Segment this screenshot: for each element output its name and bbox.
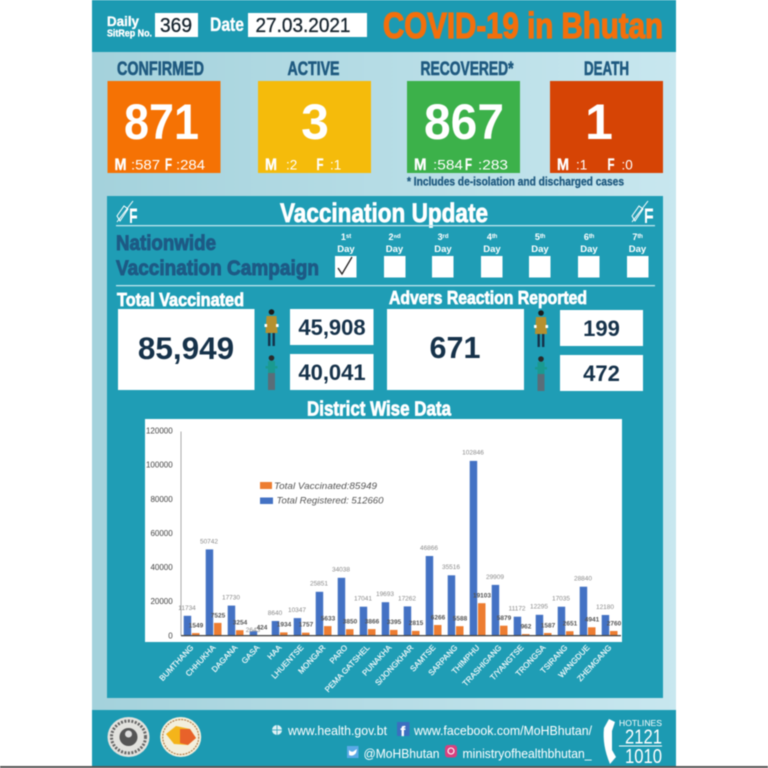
vaccinated values: 5588	[453, 616, 468, 622]
campaign heading: Vaccination Campaign	[116, 257, 319, 280]
day tracker: Day	[629, 244, 647, 255]
district labels	[158, 643, 613, 694]
registered values: 11734	[178, 605, 196, 612]
registered values: 12180	[596, 604, 614, 611]
male reactions	[560, 310, 643, 346]
female vaccinated	[290, 354, 374, 390]
panel: confirmed: F	[165, 155, 172, 174]
district labels: WANGDUE	[557, 643, 591, 680]
registered values: 12295	[530, 604, 548, 610]
icon: man	[264, 309, 279, 346]
registered values: 19693	[376, 591, 394, 598]
day tracker	[335, 232, 648, 278]
district labels: TSIRANG	[539, 643, 569, 675]
total vaccinated value	[118, 309, 254, 390]
district heading: District Wise Data	[307, 398, 452, 420]
registered values: 28840	[574, 576, 592, 582]
panel: active: :1	[330, 158, 341, 172]
day tracker: 4ᵗʰ	[487, 232, 498, 242]
website: www.health.gov.bt	[287, 723, 387, 738]
date label: Date	[210, 15, 244, 36]
district labels: DAGANA	[210, 643, 240, 674]
panel: recovered: 867	[424, 94, 504, 150]
vaccinated values: 1587	[541, 622, 556, 630]
vaccinated values: 962	[521, 624, 532, 630]
y axis: 80000	[150, 495, 173, 504]
panel: recovered	[407, 59, 520, 174]
panel: death	[550, 59, 663, 174]
registered values: 17041	[354, 596, 372, 602]
adverse reaction value: 671	[430, 331, 480, 365]
registered values	[178, 450, 614, 634]
y axis: 120000	[146, 426, 173, 436]
vaccinated values: 424	[257, 624, 268, 632]
panel: confirmed: :587	[131, 158, 160, 172]
panel: death: :0	[622, 158, 633, 172]
district labels: HAA	[266, 643, 284, 661]
y axis: 20000	[150, 597, 173, 606]
registered values: 50742	[200, 538, 218, 546]
district labels: S/JONGKHAR	[373, 643, 416, 687]
registered values: 102846	[462, 450, 484, 456]
hotlines	[619, 718, 662, 768]
total vaccinated value: 85,949	[138, 330, 234, 366]
panel: recovered: RECOVERED*	[420, 59, 514, 80]
logo: ministry emblem	[108, 717, 150, 757]
day tracker: 2ⁿᵈ	[388, 232, 401, 242]
registered values: 10347	[288, 607, 306, 614]
panel: recovered: :283	[478, 158, 508, 172]
registered values: 17035	[552, 596, 570, 602]
legend: Total Vaccinated:85949	[274, 481, 377, 491]
vaccinated values: 5879	[497, 615, 512, 622]
hotlines: 1010	[625, 746, 662, 768]
panel: death: M	[557, 155, 569, 174]
title: COVID-19 in Bhutan	[383, 5, 663, 46]
day tracker: 6ᵗʰ	[584, 232, 595, 242]
district labels: PEMA GATSHEL	[323, 643, 372, 694]
day tracker: Day	[483, 244, 501, 255]
campaign heading	[116, 232, 319, 280]
panel: confirmed: M	[114, 155, 126, 174]
report label	[107, 13, 152, 40]
panel: recovered: F	[465, 155, 472, 174]
panel: recovered: :584	[433, 158, 464, 172]
day tracker: Day	[386, 244, 404, 255]
district labels: TRASHIGANG	[461, 643, 503, 688]
hotlines: 2121	[625, 726, 662, 748]
bar chart: district wise data	[145, 419, 622, 642]
legend	[260, 481, 384, 506]
icon: twitter	[347, 746, 358, 758]
day tracker: 5ᵗʰ	[535, 232, 546, 242]
date value: 27.03.2021	[256, 15, 350, 37]
vaccinated values: 2815	[409, 620, 424, 627]
registered values: 29909	[486, 574, 504, 581]
panel: vaccination update	[107, 196, 663, 698]
y axis: 40000	[150, 563, 173, 572]
registered bars	[184, 461, 609, 636]
vaccinated values: 6266	[431, 614, 446, 622]
footnote: * Includes de-isolation and discharged cases	[407, 176, 624, 188]
registered values: 34038	[332, 566, 350, 574]
registered values: 2643	[246, 627, 261, 634]
adverse reaction heading: Advers Reaction Reported	[389, 288, 587, 308]
panel: death: F	[608, 155, 614, 174]
registered values: 46866	[420, 545, 438, 552]
day tracker: Day	[337, 244, 355, 255]
registered values: 11172	[508, 606, 526, 612]
icon: globe	[272, 725, 282, 735]
female reactions: 472	[583, 361, 620, 386]
icon: instagram	[445, 745, 457, 758]
report number: 369	[160, 15, 192, 37]
district labels: CHHUKHA	[184, 643, 218, 678]
male vaccinated	[290, 309, 374, 345]
registered values: 8640	[268, 610, 283, 617]
panel: death: 1	[585, 94, 613, 150]
day tracker: 7ᵗʰ	[632, 232, 643, 242]
panel: confirmed: :284	[176, 158, 206, 172]
logo: bhutan map	[160, 717, 201, 757]
district labels: PUNAKHA	[360, 643, 394, 678]
vaccinated values	[189, 592, 622, 632]
y axis	[146, 426, 182, 640]
vaccinated values: 4941	[585, 616, 600, 624]
panel: confirmed	[108, 59, 220, 174]
icon: woman	[535, 356, 547, 391]
vaccinated values: 2651	[563, 620, 578, 628]
icon: woman	[266, 355, 278, 390]
district labels: BUMTHANG	[158, 643, 195, 683]
vaccinated values: 3866	[365, 618, 380, 626]
panel: active: :2	[286, 158, 297, 172]
registered values: 17262	[398, 596, 416, 602]
day tracker: Day	[580, 244, 598, 255]
icon: syringe left	[117, 201, 137, 223]
registered values: 25851	[310, 580, 328, 588]
district labels: ZHEMGANG	[575, 643, 613, 683]
district labels: MONGAR	[296, 643, 328, 676]
vaccinated values: 1757	[299, 622, 314, 628]
poster background	[92, 0, 676, 766]
icon: phone	[604, 719, 616, 764]
twitter handle: @MoHBhutan	[364, 746, 440, 761]
district labels: LHUENTSE	[270, 643, 305, 681]
vaccinated values: 1549	[189, 622, 204, 630]
day tracker: 1ˢᵗ	[341, 232, 351, 242]
icon: man	[534, 310, 548, 347]
icon: facebook: f	[400, 723, 406, 739]
district labels: THIMPHU	[450, 643, 482, 676]
section heading: Vaccination Update	[280, 198, 488, 228]
vaccinated values: 7525	[211, 612, 226, 620]
panel: recovered: M	[414, 155, 426, 174]
hotlines: HOTLINES	[619, 718, 662, 728]
panel: active: M	[265, 155, 277, 174]
panel: confirmed: 871	[124, 94, 199, 150]
vaccinated values: 2760	[607, 620, 622, 628]
female vaccinated: 40,041	[298, 360, 366, 385]
male vaccinated: 45,908	[298, 315, 366, 340]
district labels: SAMTSE	[408, 643, 437, 673]
registered values: 17730	[222, 594, 240, 602]
vaccinated bars	[192, 603, 618, 636]
header band	[92, 0, 676, 52]
icon: syringe right	[632, 201, 653, 223]
report label: Daily	[107, 13, 139, 29]
panel: confirmed: CONFIRMED	[117, 59, 204, 80]
female reactions	[560, 355, 643, 391]
panel: death: DEATH	[584, 59, 629, 80]
y axis: 60000	[150, 529, 173, 538]
day tracker: Day	[434, 244, 452, 255]
day tracker: 3ʳᵈ	[438, 232, 449, 242]
district labels: SARPANG	[427, 643, 459, 678]
vaccinated values: 1934	[277, 622, 292, 628]
vaccinated values: 3395	[387, 619, 402, 626]
y axis: 100000	[146, 460, 173, 470]
icon: facebook	[397, 722, 410, 739]
instagram handle: ministryofhealthbhutan_	[462, 746, 592, 761]
facebook url: www.facebook.com/MoHBhutan/	[413, 723, 592, 738]
district labels: GASA	[240, 643, 262, 666]
male reactions: 199	[583, 316, 620, 341]
panel: active: 3	[301, 94, 329, 150]
district labels: T/YANGTSE	[488, 643, 525, 682]
registered values: 35516	[442, 564, 460, 571]
vaccinated values: 3254	[233, 620, 248, 626]
panel: active	[258, 59, 371, 174]
district labels: TRONGSA	[514, 643, 548, 678]
report label: SitRep No.	[107, 28, 152, 40]
legend: Total Registered: 512660	[276, 496, 384, 506]
vaccinated values: 5633	[321, 616, 336, 622]
panel: death: :1	[576, 158, 587, 172]
vaccinated values: 3850	[343, 618, 358, 626]
day tracker: Day	[531, 244, 549, 255]
panel: active: F	[316, 155, 324, 174]
vaccinated values: 19103	[473, 592, 491, 600]
campaign heading: Nationwide	[116, 232, 216, 255]
total vaccinated heading: Total Vaccinated	[117, 290, 244, 310]
panel: active: ACTIVE	[288, 59, 340, 80]
y axis: 0	[168, 632, 173, 640]
district labels: PARO	[328, 643, 349, 666]
footer band	[92, 710, 676, 768]
adverse reaction value	[387, 309, 524, 390]
